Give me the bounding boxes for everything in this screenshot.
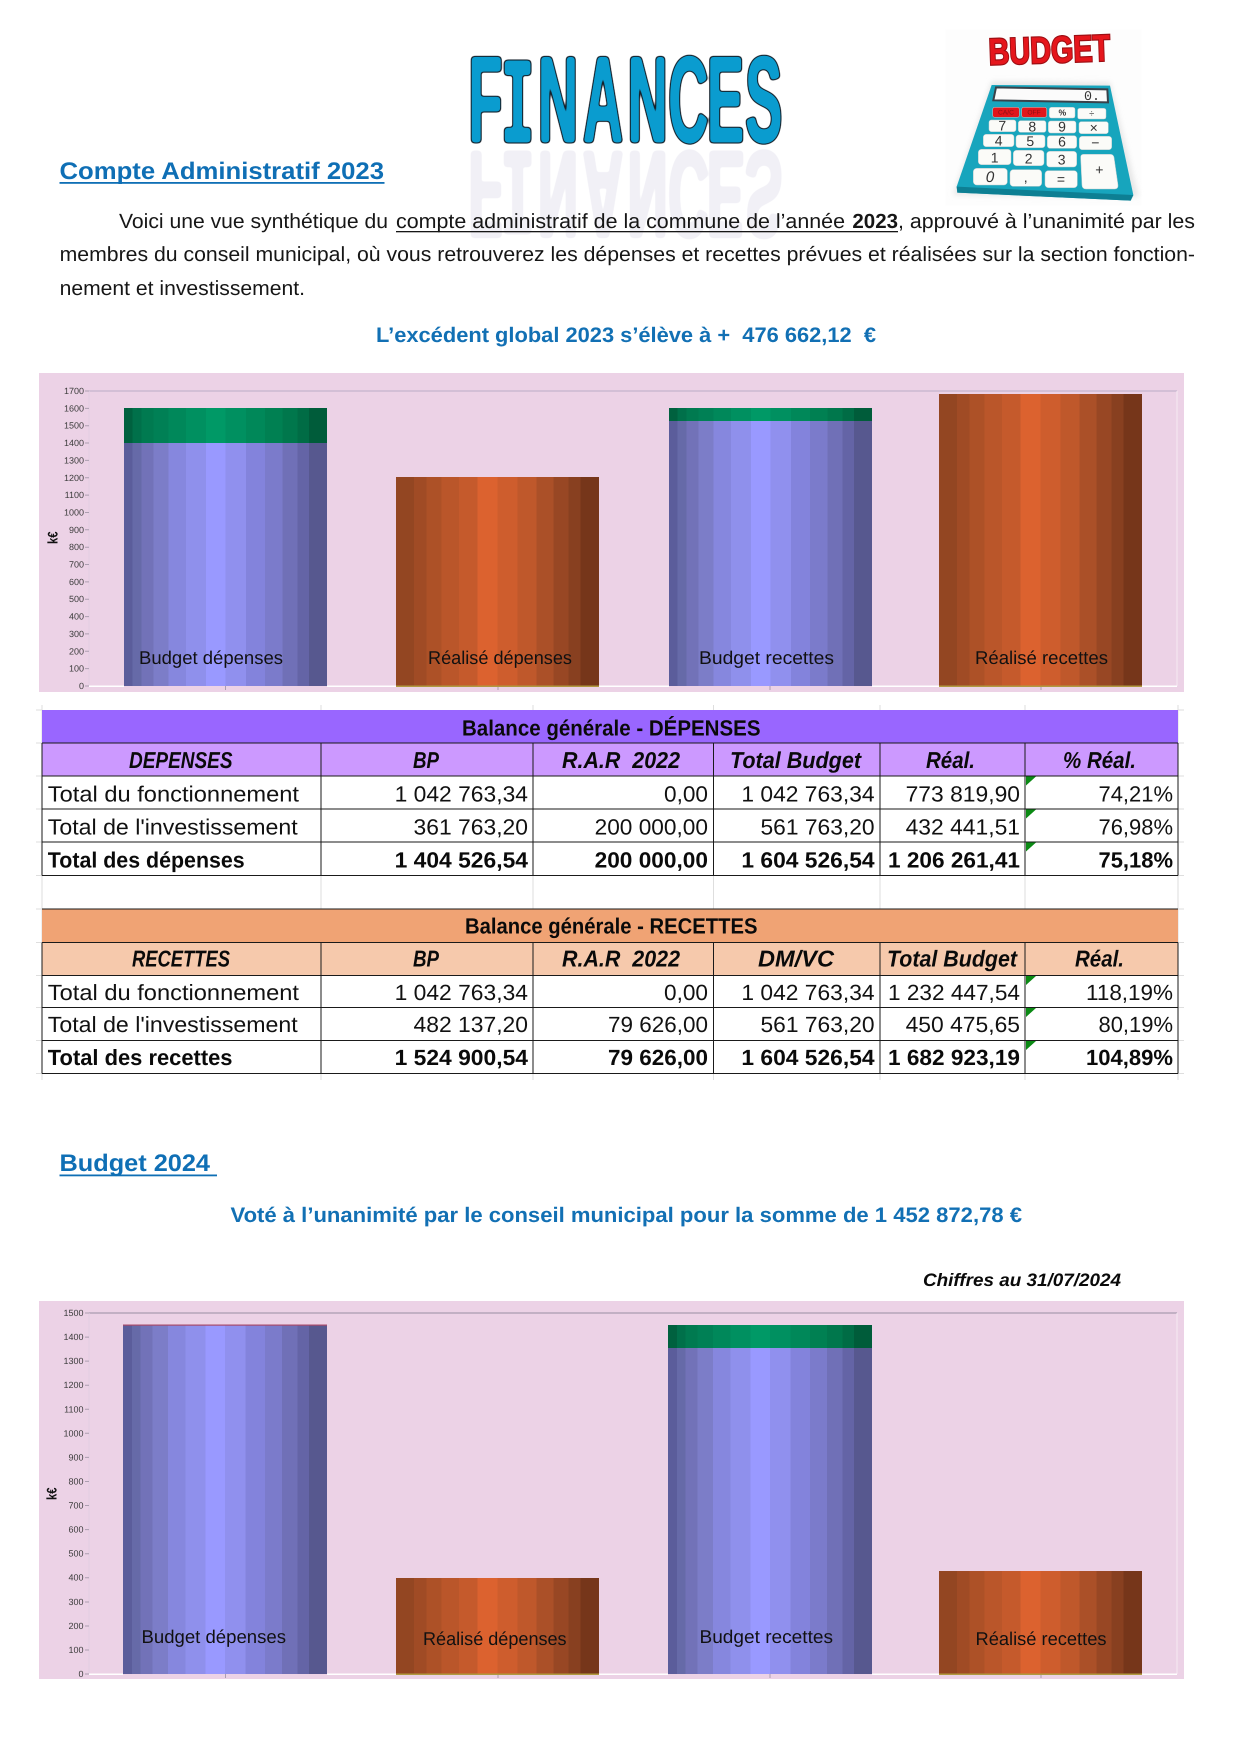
y axis labels: 100 [68,1645,84,1655]
key labels: = [1057,171,1065,187]
y axis labels: 800 [68,1476,84,1486]
table title: Balance générale - RECETTES [465,913,758,938]
header row: BP [413,946,440,972]
row: total des recettes: 104,89% [1086,1045,1173,1070]
header row: R.A.R 2022 [562,946,680,972]
callout: vote du budget: Voté à l’unanimité par le conseil municipal pour la somme de 1 452 872,78 € [230,1204,1022,1227]
key labels: , [1024,169,1028,185]
y axis labels: 900 [68,1452,84,1462]
y axis labels: 1200 [64,473,84,483]
key labels: 8 [1028,119,1036,134]
y axis labels: 300 [69,629,84,639]
header row: % Réal. [1063,747,1136,773]
row: total des dépenses: 75,18% [1098,848,1173,873]
bar: budget dépenses: Budget dépenses [142,1626,286,1647]
row: total du fonctionnement: 773 819,90 [906,782,1020,807]
row: total de l'investissement: 561 763,20 [760,1012,875,1037]
title reflection: FINANCES [468,115,782,262]
y axis labels: 700 [69,560,84,570]
table: balance générale grid [36,705,1184,1080]
intro paragraph: nement et investissement. [60,277,305,300]
row: total des recettes: 79 626,00 [608,1045,708,1070]
y axis title: k€ [44,531,60,544]
row: total du fonctionnement [48,980,1173,1005]
table: balance générale recettes [42,909,1178,1074]
key labels: 6 [1058,134,1066,150]
row: total du fonctionnement: Total du fonctionnement [48,782,299,807]
row: total de l'investissement: 80,19% [1098,1012,1173,1037]
bar: budget recettes: Budget recettes [700,1626,833,1647]
bar: budget dépenses [123,1324,327,1674]
bar: réalisé dépenses [396,1578,599,1675]
row: total de l'investissement: 361 763,20 [414,814,528,840]
row: total de l'investissement: 450 475,65 [906,1012,1020,1037]
y axis labels: 1100 [65,490,84,500]
y axis labels: 600 [69,577,84,587]
y axis labels: 1700 [64,386,84,396]
panel: chart budget 2024 [39,1301,1184,1679]
header row [129,747,1136,773]
key labels: 4 [995,133,1003,148]
header row: DM/VC [758,946,834,972]
cell markers [1026,976,1036,1050]
row: total du fonctionnement [48,782,1173,807]
calculator body [957,85,1133,201]
row: total des recettes: 1 524 900,54 [395,1045,529,1070]
y axis labels: 1100 [64,1404,84,1414]
y axis labels: 0 [78,1669,84,1679]
key labels: + [1095,162,1103,178]
keys [973,107,1118,189]
y axis labels: 100 [69,664,84,674]
header row: RECETTES [132,946,231,972]
row: total du fonctionnement: 74,21% [1098,782,1173,807]
row: total des dépenses [48,848,1173,873]
plot frame [85,1313,1177,1678]
header row: Réal. [926,747,975,773]
row: total de l'investissement: 482 137,20 [414,1012,528,1037]
bar: réalisé recettes [939,394,1142,687]
row: total du fonctionnement: 0,00 [664,980,708,1005]
row: total des recettes [48,1045,1173,1070]
y axis labels: 1500 [64,421,84,431]
bar: réalisé recettes [939,1571,1142,1675]
row: total de l'investissement: 200 000,00 [595,814,708,840]
header row: Réal. [1075,946,1124,972]
key labels: × [1090,120,1098,136]
bar: budget recettes [668,1325,872,1674]
y axis labels: 1000 [64,508,84,518]
intro paragraph: , approuvé à l’unanimité par les [898,210,1195,233]
key labels: 5 [1026,133,1034,149]
intro paragraph: 2023 [852,210,898,233]
row: total de l'investissement: 76,98% [1098,814,1173,840]
key labels: 3 [1058,152,1066,168]
y axis labels: 800 [69,542,84,552]
y axis labels: 0 [79,681,84,691]
y axis labels: 200 [69,646,84,656]
bar: réalisé dépenses: Réalisé dépenses [423,1628,567,1649]
row: total du fonctionnement: 0,00 [664,782,708,807]
row: total de l'investissement: 79 626,00 [608,1012,708,1037]
y axis labels: 500 [68,1549,84,1559]
row: total des dépenses: 200 000,00 [595,848,708,873]
title: FINANCES: FINANCES [468,32,782,179]
plot frame [85,391,1177,690]
key labels: ÷ [1089,108,1094,119]
row: total du fonctionnement: Total du fonctionnement [48,980,299,1005]
row: total des dépenses: 1 404 526,54 [395,848,529,873]
row: total de l'investissement [48,814,1173,840]
key labels: CA/C [998,109,1014,116]
row: total des recettes: 1 682 923,19 [888,1045,1020,1070]
row: total du fonctionnement: 1 042 763,34 [741,980,875,1005]
intro paragraph: Voici une vue synthétique du [119,210,388,233]
bar: budget recettes [669,408,872,686]
y axis labels: 600 [68,1525,84,1535]
key labels: 9 [1058,119,1066,135]
bar: réalisé recettes: Réalisé recettes [976,1628,1106,1649]
key labels: − [1091,135,1099,150]
header row: BP [413,747,440,773]
y axis labels [64,386,84,691]
y axis labels: 1400 [64,438,84,448]
row: total du fonctionnement: 118,19% [1086,980,1173,1005]
intro paragraph [60,210,1195,300]
y axis labels: 1500 [63,1308,84,1318]
bar: budget dépenses [124,408,327,686]
key labels: 0 [986,168,994,185]
icon: budget calculator [945,27,1141,205]
bar: réalisé dépenses: Réalisé dépenses [428,647,572,668]
header row [132,946,1124,972]
row: total des dépenses: 1 206 261,41 [888,848,1020,873]
y axis labels: 1000 [63,1428,84,1438]
note: date des chiffres: Chiffres au 31/07/2024 [923,1270,1121,1290]
row: total des dépenses: Total des dépenses [48,848,245,873]
row: total de l'investissement: Total de l'investissement [48,1012,298,1037]
key labels: 2 [1025,151,1033,167]
y axis labels: 500 [69,594,84,604]
icon: budget calculator: 0. [1084,89,1100,104]
y axis labels: 1300 [64,455,84,465]
y axis title: k€ [44,1487,60,1500]
row: total de l'investissement: Total de l'investissement [48,814,298,840]
row: total de l'investissement [48,1012,1173,1037]
y axis labels: 900 [69,525,84,535]
intro paragraph: compte administratif de la commune de l’année [396,210,845,233]
bar: budget dépenses: Budget dépenses [139,647,283,668]
cell markers [1026,776,1036,852]
header row: R.A.R 2022 [562,747,680,773]
display [993,87,1108,102]
heading: Budget 2024: Budget 2024 [60,1150,211,1177]
y axis labels: 400 [69,612,84,622]
panel: chart compte administratif 2023 [39,373,1184,692]
table: balance générale dépenses [42,710,1178,876]
key labels: % [1058,108,1066,118]
bar: budget recettes: Budget recettes [699,647,834,668]
BUDGET lettering: BUDGET [988,27,1111,73]
y axis labels: 400 [68,1573,84,1583]
row: total du fonctionnement: 1 232 447,54 [888,980,1020,1005]
row: total du fonctionnement: 1 042 763,34 [395,980,528,1005]
intro paragraph: membres du conseil municipal, où vous retrouverez les dépenses et recettes prévues et réalisées sur la section fonction- [60,243,1195,266]
key labels [986,108,1103,187]
y axis labels: 1600 [64,403,84,413]
row: total du fonctionnement: 1 042 763,34 [395,782,528,807]
row: total du fonctionnement: 1 042 763,34 [741,782,875,807]
table title: Balance générale - DÉPENSES [462,716,760,741]
y axis labels: 1300 [63,1356,84,1366]
bar: réalisé recettes: Réalisé recettes [975,647,1108,668]
row: total de l'investissement: 432 441,51 [906,814,1020,840]
row: total des recettes: Total des recettes [48,1045,232,1070]
bar: réalisé dépenses [396,477,599,687]
y axis labels: 700 [68,1500,84,1510]
y axis labels [63,1308,84,1679]
callout: excédent global: L’excédent global 2023 s’élève à + 476 662,12 € [376,324,876,347]
key labels: 7 [998,118,1006,134]
row: total de l'investissement: 561 763,20 [760,814,875,840]
key labels: 1 [991,150,999,166]
row: total des dépenses: 1 604 526,54 [741,848,875,873]
y axis labels: 1200 [63,1380,84,1390]
heading: Compte Administratif 2023: Compte Administratif 2023 [60,158,384,185]
header row: Total Budget [887,946,1018,972]
row: total des recettes: 1 604 526,54 [741,1045,875,1070]
key labels: OFF [1027,109,1041,116]
y axis labels: 200 [68,1621,84,1631]
y axis labels: 300 [68,1597,84,1607]
header row: DEPENSES [129,747,233,773]
y axis labels: 1400 [63,1332,84,1342]
header row: Total Budget [730,747,862,773]
